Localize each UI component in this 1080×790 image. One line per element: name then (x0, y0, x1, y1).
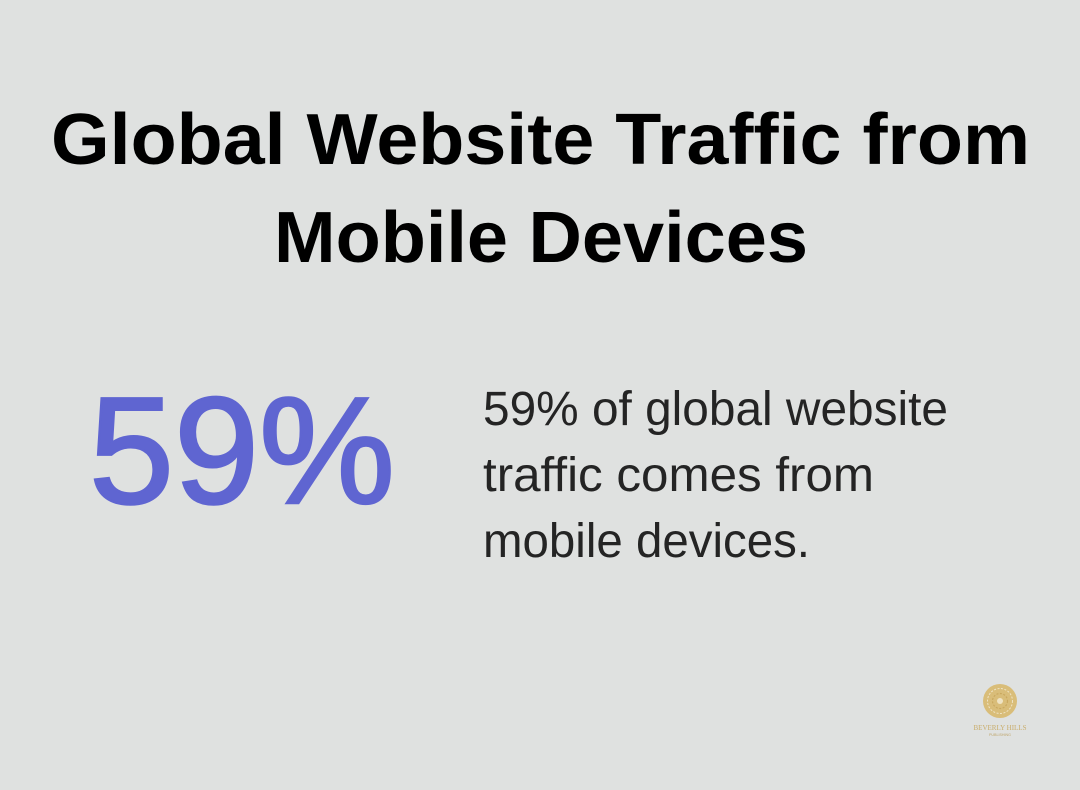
logo subline: PUBLISHING (989, 733, 1011, 737)
description text (483, 383, 948, 568)
title: Global Website Traffic from (51, 100, 1030, 180)
big statistic: 59%: 59% (89, 366, 395, 536)
title: Mobile Devices (274, 198, 808, 278)
description text: traffic comes from (483, 449, 874, 502)
title (51, 100, 1030, 278)
description text: mobile devices. (483, 515, 810, 568)
description text: 59% of global website (483, 383, 948, 436)
icon: gold ornamental medallion (983, 684, 1017, 718)
logo wordmark: BEVERLY HILLS (974, 724, 1027, 732)
logo: Beverly Hills Publishing (974, 684, 1027, 737)
